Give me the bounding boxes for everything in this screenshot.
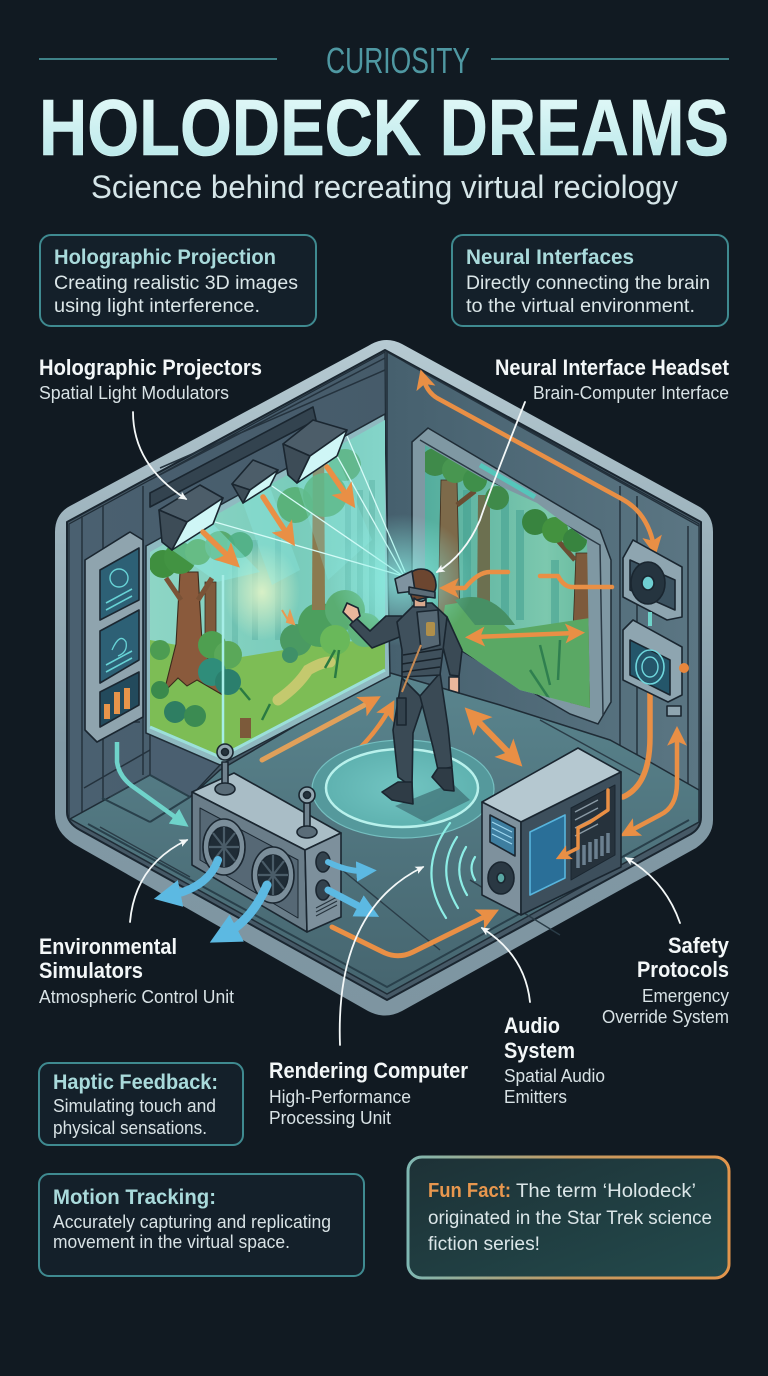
panel: neural interfaces: Directly connecting the brain: [466, 273, 710, 294]
panel: neural interfaces: to the virtual environment.: [466, 296, 695, 317]
floor edge lip: [88, 775, 689, 987]
figure: person in headset and suit: [343, 569, 462, 804]
panel: motion tracking: [39, 1174, 364, 1276]
label: safety protocols: Override System: [602, 1006, 729, 1027]
panel: haptic feedback: Haptic Feedback:: [53, 1070, 218, 1094]
projector 1: [159, 485, 223, 550]
panel: holographic projection: [40, 235, 316, 326]
label: environmental simulators: [39, 840, 234, 1007]
label: safety protocols: [602, 858, 730, 1027]
callout: fun fact: Fun Fact:: [428, 1180, 511, 1202]
callout: fun fact: fiction series!: [428, 1234, 540, 1255]
holodeck room illustration: [55, 340, 713, 1016]
projector 2: [232, 460, 278, 503]
antennas: [222, 762, 228, 787]
label: holographic projectors: Holographic Projectors: [39, 355, 262, 380]
label: rendering computer: High-Performance: [269, 1086, 411, 1107]
panel: holographic projection: Creating realistic 3D images: [54, 273, 298, 294]
ground: [150, 640, 385, 754]
label: safety protocols: Emergency: [642, 985, 730, 1006]
callout: fun fact: originated in the Star Trek science: [428, 1208, 712, 1229]
panel: left forest projection: [140, 410, 400, 770]
icon: environmental simulator unit: [192, 744, 341, 932]
fans: [203, 819, 245, 875]
callout: fun fact: [408, 1157, 729, 1278]
panel: holographic projection: Holographic Projection: [54, 245, 276, 269]
icon: wall device dial: [623, 540, 682, 620]
panel: motion tracking: Accurately capturing and replicating: [53, 1211, 331, 1232]
panel: right forest view: [412, 428, 611, 724]
foreground bushes: [198, 631, 226, 659]
icon: projectors: [150, 407, 347, 550]
panel: haptic feedback: [39, 1063, 243, 1145]
arrows: projector output: [203, 467, 349, 560]
head and hair: [407, 569, 436, 601]
room shell: [55, 340, 713, 1016]
panel: neural interfaces: Neural Interfaces: [466, 245, 634, 269]
label: neural interface headset: [437, 355, 730, 572]
panel: motion tracking: movement in the virtual space.: [53, 1231, 290, 1252]
floor tracking pad: [312, 740, 494, 838]
panel: wall status display: [85, 532, 143, 742]
label: rendering computer: Rendering Computer: [269, 1058, 468, 1083]
side ports: [316, 852, 330, 872]
label: rendering computer: Processing Unit: [269, 1107, 391, 1128]
arrows: data routing on walls and floor: [262, 378, 677, 956]
label: safety protocols: Protocols: [637, 957, 729, 982]
label: safety protocols: Safety: [668, 933, 730, 958]
label: environmental simulators: Environmental: [39, 934, 177, 959]
arrows: blue air flow: [168, 860, 368, 935]
trunks: [312, 466, 325, 610]
teal conduit arrow: [117, 742, 182, 822]
icon: rendering computer: [482, 748, 621, 915]
label: audio system: [482, 928, 605, 1107]
right bushes: [280, 624, 312, 656]
left wall: [69, 352, 387, 820]
label: audio system: Audio: [504, 1013, 560, 1038]
right arm and hand: [443, 617, 462, 676]
left base steps: [150, 727, 220, 797]
light beams from projectors: [172, 436, 474, 750]
left leg: [393, 678, 424, 787]
panel: neural interfaces: [452, 235, 728, 326]
label: audio system: System: [504, 1038, 575, 1063]
panel: holographic projection: using light interference.: [54, 296, 260, 317]
subtitle: Science behind recreating virtual reciology: [91, 169, 678, 205]
floor: [70, 672, 699, 994]
panel: haptic feedback: Simulating touch and: [53, 1095, 216, 1116]
canopies: [150, 550, 174, 578]
label: holographic projectors: [39, 355, 262, 499]
arrow: internal computer circuit: [562, 790, 608, 856]
label: environmental simulators: Simulators: [39, 958, 143, 983]
callout: fun fact: The term ‘Holodeck’: [516, 1181, 696, 1202]
torso: [397, 603, 447, 677]
left arm and hand: [350, 616, 402, 648]
label: rendering computer: [269, 867, 468, 1128]
icon: wall device scanner: [623, 612, 689, 716]
projector 3: [283, 420, 347, 483]
right leg: [420, 673, 452, 770]
label: neural interface headset: Neural Interface Headset: [495, 355, 730, 380]
label: holographic projectors: Spatial Light Modulators: [39, 382, 229, 403]
boots: [382, 782, 413, 804]
sound waves from audio system: [431, 823, 475, 918]
panel: motion tracking: Motion Tracking:: [53, 1185, 216, 1209]
label: audio system: Spatial Audio: [504, 1065, 605, 1086]
right wall: [387, 352, 699, 822]
label: audio system: Emitters: [504, 1086, 567, 1107]
eyebrow heading: Curiosity: CURIOSITY: [326, 40, 470, 81]
headset: [395, 571, 415, 593]
panel: haptic feedback: physical sensations.: [53, 1117, 207, 1138]
label: environmental simulators: Atmospheric Control Unit: [39, 986, 234, 1007]
label: neural interface headset: Brain-Computer Interface: [533, 382, 729, 403]
wall panel lines: [82, 352, 699, 815]
